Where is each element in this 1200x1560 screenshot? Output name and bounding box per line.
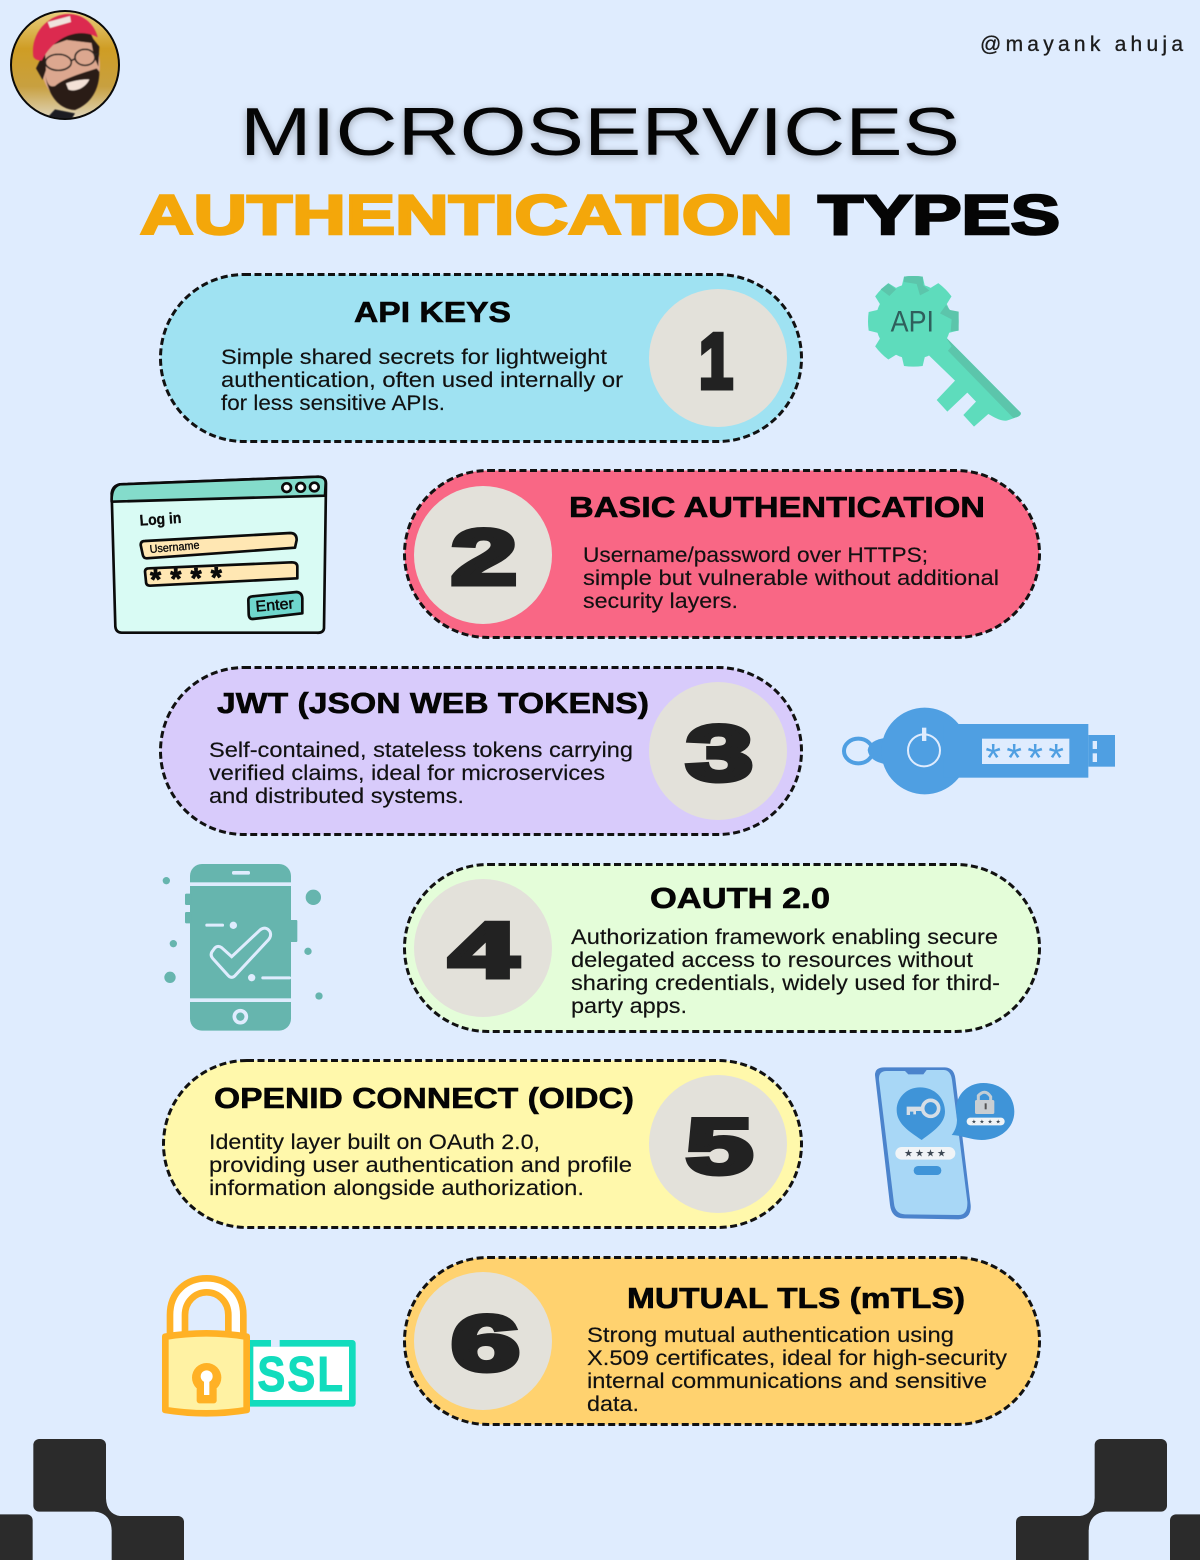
heading: OAUTH 2.0 (650, 883, 830, 915)
pill background (160, 668, 802, 834)
pill background (160, 274, 802, 442)
pill background (164, 1060, 802, 1228)
number badge 1: 1 (699, 317, 733, 405)
number badge 3 (649, 682, 787, 820)
heading: JWT (JSON WEB TOKENS) (217, 688, 649, 720)
description (209, 1131, 632, 1200)
description: for less sensitive APIs. (221, 392, 445, 415)
description: delegated access to resources without (571, 949, 973, 972)
number badge 3: 3 (686, 709, 753, 797)
icon: login window: Enter (255, 595, 295, 616)
icon: API key: API (891, 305, 934, 338)
description: simple but vulnerable without additional (583, 567, 999, 590)
description: Strong mutual authentication using (587, 1324, 954, 1347)
panel 2: basic authentication (404, 470, 1040, 638)
pill background (404, 864, 1040, 1032)
title: AUTHENTICATION TYPES (140, 183, 1060, 246)
decoration: bottom left checker (0, 1439, 184, 1560)
description: Authorization framework enabling secure (571, 926, 998, 949)
avatar photo (11, 11, 119, 122)
decoration: bottom right checker (1016, 1439, 1200, 1560)
number badge 6: 6 (451, 1299, 520, 1387)
title: AUTHENTICATION TYPES: AUTHENTICATION (140, 183, 793, 246)
panel 6: mutual TLS (404, 1258, 1040, 1424)
description: sharing credentials, widely used for third- (571, 972, 1000, 995)
icon: USB security token (844, 708, 1115, 794)
description: X.509 certificates, ideal for high-security (587, 1347, 1008, 1370)
description: providing user authentication and profile (209, 1154, 632, 1177)
description: verified claims, ideal for microservices (209, 762, 605, 785)
description: Identity layer built on OAuth 2.0, (209, 1131, 540, 1154)
panel 3: JWT (160, 668, 802, 834)
number badge 4: 4 (449, 906, 518, 994)
title: AUTHENTICATION TYPES: TYPES (818, 183, 1060, 246)
description (209, 739, 633, 808)
icon: phone with checkmark (163, 864, 323, 1031)
description: authentication, often used internally or (221, 369, 623, 392)
description: Self-contained, stateless tokens carrying (209, 739, 633, 762)
icon: SSL padlock (165, 1278, 352, 1413)
heading: MUTUAL TLS (mTLS) (627, 1283, 965, 1315)
panel 4: OAuth 2.0 (404, 864, 1040, 1032)
author handle: @mayank ahuja (980, 33, 1183, 56)
description: Simple shared secrets for lightweight (221, 346, 607, 369)
number badge 6 (414, 1272, 552, 1410)
icon: SSL padlock: SSL (257, 1347, 343, 1402)
number badge 5 (649, 1075, 787, 1213)
description: information alongside authorization. (209, 1177, 584, 1200)
icon: login window (112, 477, 326, 633)
icon: login window: Log in (139, 510, 182, 530)
icon: 3D phone with key and lock: ★★★★ (971, 1118, 1001, 1125)
description (583, 544, 999, 613)
heading: OPENID CONNECT (OIDC) (214, 1083, 634, 1115)
number badge 1 (649, 289, 787, 427)
heading: BASIC AUTHENTICATION (569, 492, 985, 524)
number badge 2 (414, 486, 552, 624)
description: party apps. (571, 995, 687, 1018)
description: internal communications and sensitive (587, 1370, 987, 1393)
number badge 2: 2 (451, 513, 517, 601)
description (587, 1324, 1008, 1416)
description: security layers. (583, 590, 738, 613)
description: and distributed systems. (209, 785, 464, 808)
title: MICROSERVICES: MICROSERVICES (240, 94, 960, 170)
panel 1: API keys (160, 274, 802, 442)
description: Username/password over HTTPS; (583, 544, 928, 567)
description (221, 346, 623, 415)
icon: login window: **** (150, 562, 223, 595)
description (571, 926, 1000, 1018)
heading: API KEYS (354, 297, 511, 329)
icon: USB security token: **** (985, 737, 1064, 781)
number badge 4 (414, 879, 552, 1017)
icon: 3D phone with key and lock: ★★★★ (904, 1148, 946, 1159)
icon: API key (868, 276, 1021, 427)
description: data. (587, 1393, 639, 1416)
number badge 5: 5 (686, 1102, 753, 1190)
pill background (404, 470, 1040, 638)
icon: 3D phone with key and lock (875, 1067, 1014, 1219)
icon: login window: Username (149, 540, 200, 556)
panel 5: OpenID Connect (164, 1060, 802, 1228)
pill background (404, 1258, 1040, 1424)
